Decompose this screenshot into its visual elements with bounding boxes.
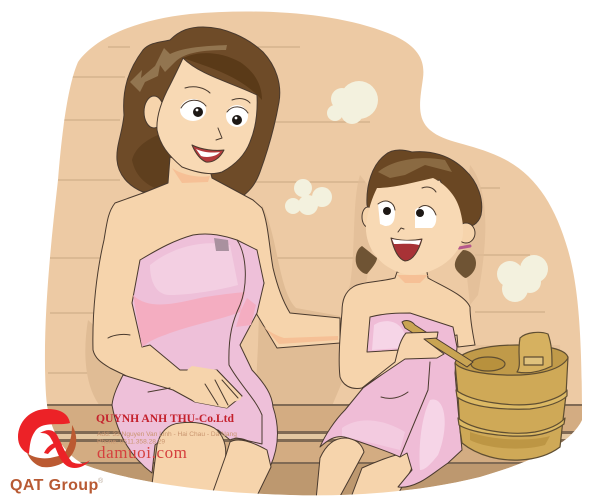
company name: QUYNH ANH THU-Co.Ltd (96, 412, 235, 425)
daughter towel (320, 313, 462, 487)
mother face (157, 58, 257, 174)
daughter ears (362, 207, 374, 227)
mother ear (144, 96, 164, 128)
logo wordmark: QAT Group (10, 477, 99, 494)
daughter pigtails (356, 246, 377, 274)
daughter legs (316, 438, 364, 500)
logo mark red crescent (18, 409, 70, 454)
logo mark brown crescent (27, 425, 76, 467)
steam cloud 1 (327, 81, 378, 124)
daughter hair tie (459, 246, 470, 248)
mother (93, 27, 340, 500)
daughter hair (367, 150, 482, 228)
registered mark: ® (98, 477, 104, 485)
address: Add: 33 Nguyen Van Linh - Hai Chau - Da Nang (97, 431, 237, 438)
website: damuoi.com (97, 443, 188, 462)
logo mark cross strokes (40, 430, 90, 468)
wooden bench (40, 404, 585, 500)
mother hair (117, 27, 280, 196)
company logo (10, 409, 104, 494)
ladle handle (402, 321, 473, 367)
mother hand (184, 366, 242, 408)
mother towel (112, 234, 278, 473)
daughter mouth (391, 238, 422, 261)
daughter face (366, 178, 463, 275)
steam cloud 2 (285, 179, 332, 215)
wall shadows behind figures (86, 166, 485, 404)
daughter body and arms (339, 272, 475, 388)
wooden bucket (455, 332, 568, 460)
mother legs (150, 422, 226, 500)
mother mouth (192, 145, 224, 162)
steam cloud 3 (497, 255, 548, 302)
phone: Phone: 0511.358.28.29 (97, 438, 165, 446)
mother body and arms (93, 157, 340, 408)
daughter (316, 150, 568, 500)
daughter eyes (378, 187, 436, 232)
white mask below curve (0, 420, 600, 500)
mother eyes (180, 87, 250, 140)
daughter hand (362, 332, 444, 388)
